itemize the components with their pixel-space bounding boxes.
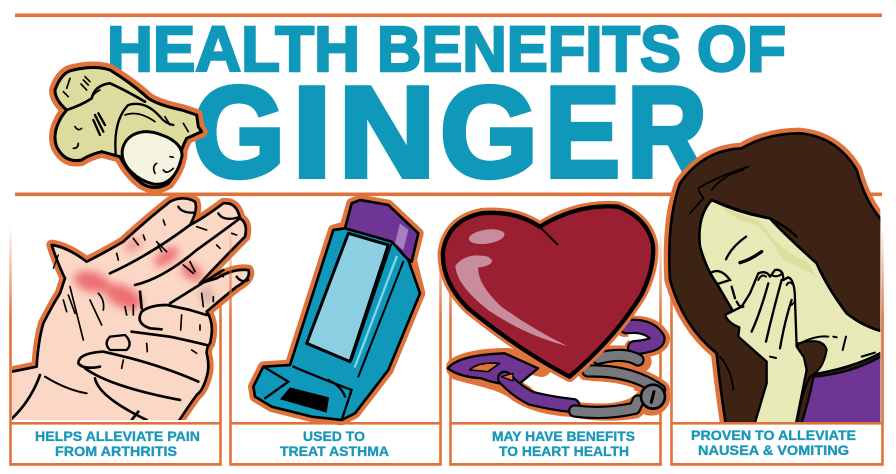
label: nausea — [691, 427, 856, 458]
title: N — [338, 60, 436, 204]
title: G — [440, 60, 538, 204]
panel: nausea — [669, 133, 887, 466]
title: HEALTH — [107, 13, 360, 85]
icon: arthritic hand — [7, 198, 249, 430]
title — [107, 13, 786, 204]
hand — [725, 270, 807, 428]
title: I — [292, 60, 332, 204]
panel: arthritis — [7, 198, 249, 466]
label: asthma: TREAT ASTHMA — [280, 443, 389, 459]
label: heart: TO HEART HEALTH — [499, 443, 629, 459]
icon: nauseous woman — [669, 133, 887, 430]
label: nausea: PROVEN TO ALLEVIATE — [691, 427, 856, 443]
label: nausea: NAUSEA & VOMITING — [698, 442, 849, 458]
label: asthma: USED TO — [303, 428, 365, 444]
icon: heart — [443, 206, 653, 377]
icon: inhaler — [253, 200, 420, 420]
title: G — [192, 60, 285, 204]
panel: heart — [443, 206, 665, 466]
label: arthritis — [35, 428, 200, 459]
title: BENEFITS — [377, 13, 681, 85]
label: asthma — [280, 428, 389, 459]
label: heart: MAY HAVE BENEFITS — [492, 428, 635, 444]
title: OF — [697, 13, 786, 85]
icon: ginger root — [55, 67, 202, 187]
label: arthritis: FROM ARTHRITIS — [55, 443, 177, 459]
title: E — [545, 60, 620, 204]
face — [699, 200, 883, 375]
label: heart — [492, 428, 635, 459]
panel: asthma — [230, 200, 442, 466]
icon: stethoscope — [448, 326, 665, 412]
label: arthritis: HELPS ALLEVIATE PAIN — [35, 428, 200, 444]
title: R — [627, 60, 707, 204]
